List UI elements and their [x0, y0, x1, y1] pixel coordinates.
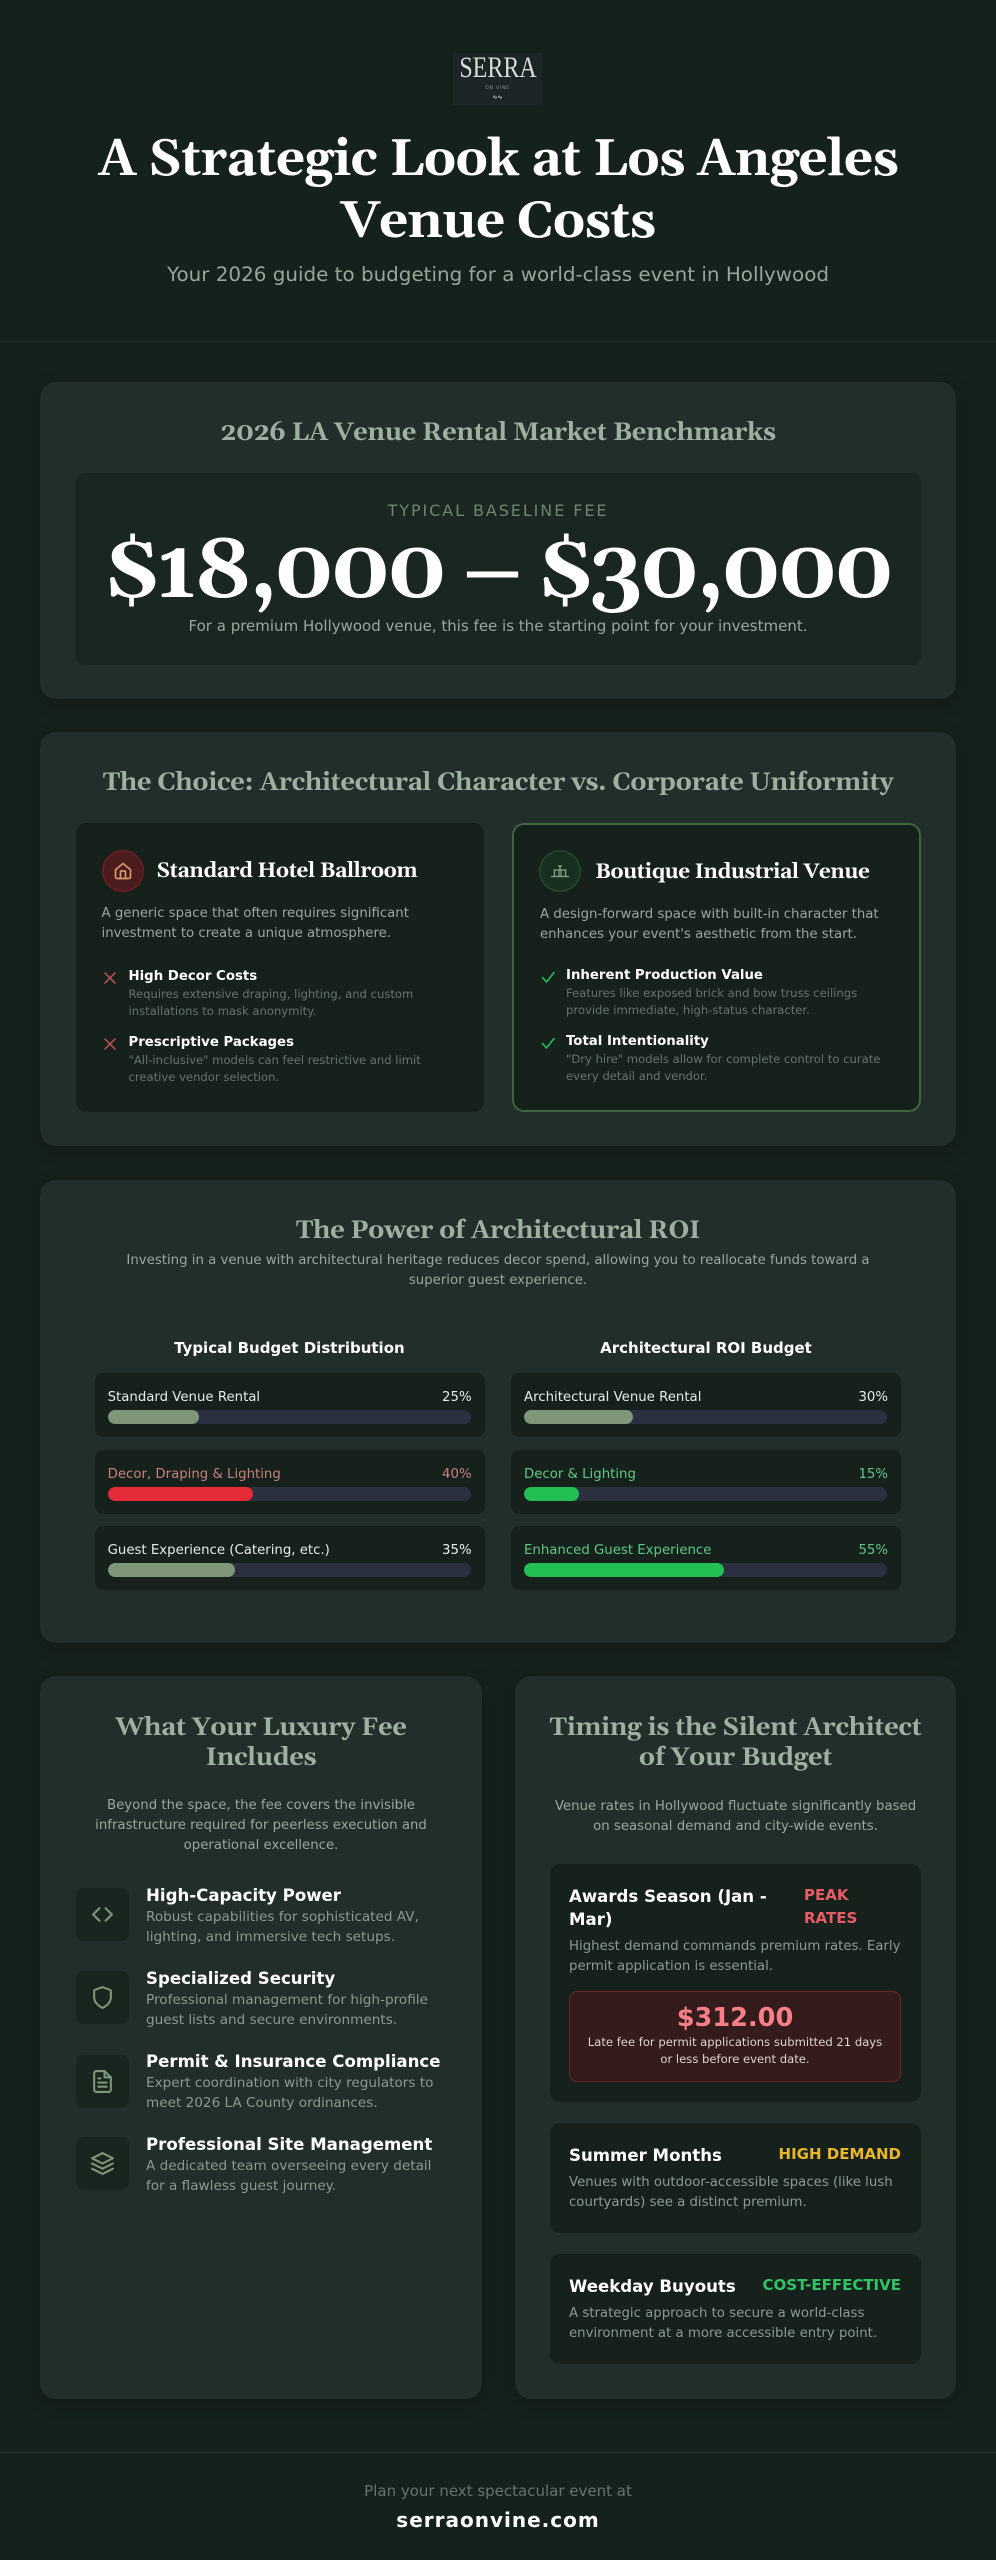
season description: Venues with outdoor-accessible spaces (like lush	[569, 2175, 893, 2190]
card description	[102, 906, 409, 941]
logo: ON VINE	[485, 86, 510, 90]
season description: A strategic approach to secure a world-class	[569, 2306, 864, 2321]
card description: A design-forward space with built-in character that	[540, 907, 879, 922]
logo: ∿∿	[492, 94, 503, 100]
season card: weekday buyouts	[550, 2254, 921, 2364]
bullet: total intentionality: Total Intentionality	[566, 1034, 709, 1049]
feature: specialized security	[146, 1968, 428, 2028]
panel: timing	[515, 1676, 956, 2399]
bullet: prescriptive packages	[104, 1035, 421, 1084]
bar: guest experience 35%: Guest Experience (Catering, etc.)	[108, 1542, 330, 1558]
bullet: inherent production value: provide immediate, high-status character.	[566, 1002, 810, 1016]
bar: decor and lighting 15%: 15%	[858, 1466, 888, 1482]
bullet: inherent production value: Features like exposed brick and bow truss ceilings	[566, 986, 857, 1000]
ROI description: Investing in a venue with architectural heritage reduces decor spend, allowing you to reallocate funds toward a	[126, 1253, 870, 1268]
label: typical baseline fee: TYPICAL BASELINE FEE	[388, 501, 608, 520]
bar: enhanced guest experience 55%: 55%	[858, 1542, 888, 1558]
card description: investment to create a unique atmosphere.	[102, 926, 391, 941]
badge: peak rates	[804, 1886, 857, 1926]
icon: layers	[76, 2137, 129, 2190]
feature: specialized security: Specialized Security	[146, 1968, 335, 1988]
season title: Mar)	[569, 1910, 612, 1928]
season description	[569, 2175, 893, 2210]
panel: what your luxury fee includes	[40, 1676, 482, 2399]
timing description: Venue rates in Hollywood fluctuate significantly based	[555, 1799, 916, 1814]
bullet: high decor costs: High Decor Costs	[128, 969, 257, 984]
feature: professional site management: for a flawless guest journey.	[146, 2178, 336, 2194]
subtitle: Your 2026 guide to budgeting for a world-class event in Hollywood	[167, 263, 829, 286]
feature: permit and insurance compliance: Expert coordination with city regulators to	[146, 2074, 433, 2090]
footer note: Plan your next spectacular event at	[364, 2482, 632, 2500]
panel: architectural ROI	[40, 1180, 956, 1643]
bar: decor and lighting 15%: Decor & Lighting	[524, 1466, 636, 1482]
bullet: prescriptive packages: creative vendor selection.	[128, 1070, 279, 1084]
late fee callout	[569, 1991, 901, 2082]
luxury fee description: operational excellence.	[184, 1838, 338, 1853]
season description: permit application is essential.	[569, 1959, 773, 1974]
price note: For a premium Hollywood venue, this fee is the starting point for your investment.	[189, 617, 807, 635]
feature: permit and insurance compliance: Permit & Insurance Compliance	[146, 2052, 440, 2070]
badge: peak rates: PEAK	[804, 1886, 848, 1904]
ROI description: superior guest experience.	[409, 1272, 587, 1288]
feature: high-capacity power	[146, 1886, 419, 1944]
panel: market benchmarks	[40, 382, 956, 699]
bullet: high decor costs	[104, 969, 413, 1018]
timing description: on seasonal demand and city-wide events.	[593, 1819, 878, 1834]
timing description	[555, 1799, 916, 1834]
card title: Standard Hotel Ballroom	[156, 859, 417, 885]
panel: the choice	[40, 732, 956, 1146]
season description	[569, 1939, 900, 1974]
price range: $18,000 – $30,000	[105, 519, 891, 626]
badge: high demand: HIGH DEMAND	[779, 2144, 901, 2162]
ROI description	[126, 1253, 870, 1288]
bullet: prescriptive packages: "All-inclusive" models can feel restrictive and limit	[128, 1053, 421, 1067]
title	[98, 126, 898, 254]
bar: standard venue rental 25%: Standard Venue Rental	[108, 1390, 260, 1404]
late fee note: Late fee for permit applications submitted 21 days	[588, 2034, 882, 2048]
card: standard hotel ballroom	[76, 823, 484, 1112]
bar: standard venue rental 25%	[95, 1373, 485, 1437]
season description: environment at a more accessible entry point.	[569, 2326, 877, 2341]
bar: guest experience 35%	[95, 1526, 485, 1590]
bullet: inherent production value	[542, 968, 857, 1016]
baseline fee box	[75, 473, 921, 665]
bullet: inherent production value: Inherent Production Value	[566, 968, 763, 983]
luxury fee description: infrastructure required for peerless execution and	[95, 1818, 427, 1833]
card title: Boutique Industrial Venue	[595, 860, 869, 886]
card description: enhances your event's aesthetic from the start.	[540, 927, 857, 942]
feature: permit and insurance compliance	[146, 2052, 440, 2110]
feature: professional site management	[146, 2134, 432, 2194]
heading: luxury fee: Includes	[206, 1740, 316, 1774]
bullet: high decor costs: Requires extensive draping, lighting, and custom	[128, 987, 413, 1001]
feature: professional site management: Professional Site Management	[146, 2134, 432, 2154]
logo: SERRA	[459, 51, 536, 84]
title: A Strategic Look at Los Angeles	[98, 126, 898, 192]
feature: high-capacity power: lighting, and immersive tech setups.	[146, 1928, 395, 1944]
footer	[0, 2452, 996, 2560]
bar: architectural venue rental 30%: 30%	[858, 1390, 888, 1404]
logo	[453, 53, 542, 105]
feature: specialized security: guest lists and secure environments.	[146, 2012, 397, 2028]
season card: awards season	[550, 1864, 921, 2102]
bar: guest experience 35%: 35%	[442, 1542, 472, 1558]
late fee amount: $312.00	[677, 2003, 793, 2033]
icon: document	[76, 2054, 129, 2108]
bar: decor, draping and lighting 40%: 40%	[442, 1466, 472, 1482]
late fee note	[588, 2034, 882, 2066]
heading: market benchmarks: 2026 LA Venue Rental Market Benchmarks	[220, 416, 776, 448]
title: Venue Costs	[341, 188, 655, 254]
heading: luxury fee: What Your Luxury Fee	[116, 1710, 406, 1744]
feature: permit and insurance compliance: meet 2026 LA County ordinances.	[146, 2094, 378, 2110]
card description: A generic space that often requires significant	[102, 906, 409, 921]
season card: summer months	[550, 2123, 921, 2233]
luxury fee description	[95, 1798, 427, 1853]
season title: Awards Season (Jan -	[569, 1886, 767, 1906]
footer website: serraonvine.com	[396, 2508, 600, 2532]
icon: landmark	[539, 850, 581, 892]
icon: code brackets	[76, 1888, 129, 1941]
icon: shield	[76, 1971, 129, 2024]
feature: specialized security: Professional management for high-profile	[146, 1992, 428, 2008]
column heading: architectural budget: Architectural ROI Budget	[600, 1339, 812, 1357]
heading: architectural ROI: The Power of Architectural ROI	[296, 1214, 700, 1247]
season description	[569, 2306, 877, 2341]
season description: Highest demand commands premium rates. Early	[569, 1939, 900, 1954]
heading: the choice: The Choice: Architectural Character vs. Corporate Uniformity	[103, 766, 893, 798]
bullet: total intentionality: "Dry hire" models allow for complete control to curate	[566, 1052, 880, 1066]
bullet: total intentionality	[542, 1034, 880, 1082]
bar: enhanced guest experience 55%	[511, 1526, 901, 1590]
badge: peak rates: RATES	[804, 1908, 857, 1926]
bar: decor, draping and lighting 40%	[95, 1450, 485, 1514]
season title	[569, 1886, 767, 1928]
bullet: prescriptive packages: Prescriptive Packages	[128, 1035, 294, 1050]
heading: timing: Timing is the Silent Architect	[550, 1710, 921, 1744]
bullet: total intentionality: every detail and vendor.	[566, 1068, 707, 1082]
season title: Summer Months	[569, 2146, 722, 2164]
card description	[540, 907, 879, 942]
icon: house	[102, 850, 144, 892]
feature: high-capacity power: High-Capacity Power	[146, 1886, 341, 1904]
bar: enhanced guest experience 55%: Enhanced Guest Experience	[524, 1542, 711, 1558]
column heading: typical budget: Typical Budget Distribution	[174, 1339, 405, 1357]
bullet: high decor costs: installations to mask anonymity.	[128, 1004, 316, 1018]
late fee note: or less before event date.	[660, 2052, 810, 2066]
heading: luxury fee	[115, 1710, 406, 1774]
bar: decor and lighting 15%	[511, 1450, 901, 1514]
season title: Weekday Buyouts	[569, 2276, 736, 2296]
bar: decor, draping and lighting 40%: Decor, Draping & Lighting	[108, 1466, 281, 1482]
heading: timing	[550, 1710, 922, 1774]
bar: architectural venue rental 30%	[511, 1373, 901, 1437]
header divider	[0, 341, 996, 342]
feature: high-capacity power: Robust capabilities for sophisticated AV,	[146, 1908, 419, 1924]
bar: architectural venue rental 30%: Architectural Venue Rental	[524, 1390, 701, 1404]
season description: courtyards) see a distinct premium.	[569, 2195, 807, 2210]
feature: professional site management: A dedicated team overseeing every detail	[146, 2158, 431, 2174]
heading: timing: of Your Budget	[639, 1740, 832, 1774]
badge: cost-effective: COST-EFFECTIVE	[763, 2276, 901, 2294]
luxury fee description: Beyond the space, the fee covers the invisible	[107, 1798, 415, 1813]
card: boutique industrial venue	[512, 823, 921, 1112]
bar: standard venue rental 25%: 25%	[442, 1390, 472, 1404]
